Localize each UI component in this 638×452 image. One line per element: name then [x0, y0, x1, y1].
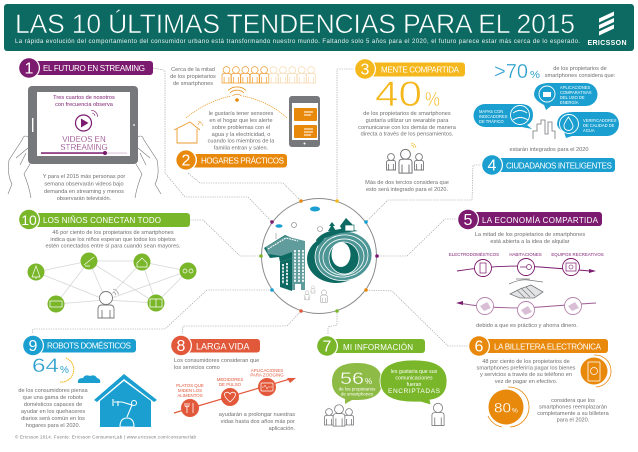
icons: top arrow with rentals — [457, 258, 596, 276]
text: robots: domésticos capaces de — [24, 402, 82, 408]
labels: rental categories: EQUIPOS RECREATIVOS — [551, 252, 604, 257]
text: reemplazarán: smartphones reemplazarán — [539, 404, 607, 410]
heading 7: MI INFORMACIÓN — [343, 343, 413, 352]
bubble: mapas: INDICADORES — [479, 114, 508, 119]
tablet screen — [32, 92, 135, 156]
text: pagar — [477, 359, 576, 385]
heading 5: 5 — [464, 212, 473, 229]
tablet screen: con frecuencia observa — [55, 102, 114, 108]
panel: 1 el futuro en streaming — [8, 57, 161, 202]
bubble: agua: DE CALIDAD DE — [583, 123, 615, 128]
text: sensores: familia entran y salen. — [214, 146, 269, 152]
text: cerca de la mitad — [170, 67, 216, 87]
stat 64%: 64 — [32, 356, 60, 377]
text: pagar: smartphones preferiría pagar los bienes — [477, 366, 576, 372]
text: prolongar: ayudarán a prolongar nuestras — [219, 412, 295, 418]
labels: rental categories: ELECTRODOMÉSTICOS — [449, 252, 499, 257]
text: pagar: 48 por ciento de los propietarios de — [482, 359, 570, 365]
labels: services: MEDIDORES — [217, 377, 243, 382]
text: consumidores: Los consumidores consideran que — [174, 358, 259, 364]
heading 9: 9 — [29, 338, 38, 355]
stat 40%: % — [425, 89, 440, 111]
icon: tablet — [28, 86, 138, 164]
text: ahorra dinero: debido a que es práctico y ahorra dinero. — [476, 323, 578, 329]
text: streaming — [43, 174, 125, 202]
icon: people — [324, 405, 354, 426]
tablet screen: STREAMING — [60, 143, 108, 152]
text: streaming: observarán televisión. — [57, 196, 112, 202]
stat 40%: 40 — [375, 75, 422, 114]
icon: handshake — [509, 279, 543, 298]
text: robots: hogares para el 2020. — [26, 423, 81, 429]
bubble: agua — [557, 112, 619, 138]
stat 80%: 80 — [494, 400, 511, 416]
bubble: aplicaciones: APLICACIONES — [560, 85, 591, 90]
bubble: 56%: de smartphones — [341, 392, 374, 396]
text: pagar: y servicios a través de su teléfono en — [480, 372, 572, 378]
title: LAS 10 ÚLTIMAS TENDENCIAS PARA EL 2015 — [15, 9, 575, 39]
text: cerca de la mitad: de smartphones — [173, 81, 213, 87]
bubble: agua: VERIFICADORES — [583, 118, 617, 123]
heading 3 — [354, 58, 465, 80]
heading 2: 2 — [182, 152, 191, 170]
text: niños: 46 por ciento de los propietarios de smartphones — [52, 230, 174, 236]
stat 70%: % — [530, 70, 540, 81]
panel: 8 larga vida — [170, 334, 296, 432]
heading 4 — [481, 154, 615, 176]
heading 7: 7 — [323, 338, 332, 356]
labels: services — [176, 368, 284, 398]
text: cerca de la mitad: Cerca de la mitad — [171, 67, 215, 73]
text: streaming: demanda en streaming y menos — [44, 189, 124, 195]
icon: house — [174, 121, 203, 143]
icon: wifi with dotted arcs — [186, 87, 287, 118]
bubble: aplicaciones: DEL USO DE — [560, 95, 585, 100]
text: sensores: sobre problemas con el — [212, 125, 270, 131]
text: wearable: de los propietarios de smartphones — [363, 111, 451, 117]
labels: services: PLATOS QUE — [176, 383, 204, 388]
heading 5 — [457, 208, 602, 230]
icon: cloud — [78, 375, 100, 383]
text: robots: ayudar en los quehaceres — [21, 409, 85, 415]
text: wearable: gustaría utilizar un wearable para — [366, 118, 449, 124]
heading 1: 1 — [25, 60, 34, 78]
text: cerca de la mitad: de los propietarios — [170, 74, 216, 80]
connector lines — [32, 68, 482, 346]
network diagram — [28, 252, 196, 318]
stat 80% — [488, 387, 529, 427]
icon: hands — [8, 136, 161, 198]
stat 64% — [32, 356, 74, 382]
text: robots — [18, 388, 89, 429]
bubble: encriptadas: fueran — [407, 382, 421, 388]
text: niños: estén conectados entre sí para cuando sean mayores. — [46, 244, 181, 250]
bubble: aplicaciones: ENERGÍA — [560, 100, 579, 105]
icon: ten people — [222, 67, 316, 83]
icon: robot house — [94, 374, 157, 427]
heading 8 — [170, 334, 260, 356]
heading 4: 4 — [488, 158, 497, 174]
labels: rental categories: HABITACIONES — [509, 252, 542, 257]
labels: services: DE PULSO — [219, 382, 242, 387]
text: prolongar: aplicación. — [269, 426, 295, 432]
text: sensores: en el hogar que les alerte — [209, 118, 273, 124]
subtitle: La rápida evolución del comportamiento del consumidor urbano está transformando nuestro mundo. Faltando solo 5 años para el 2020, el futuro parece estar más cerca de lo esperado. — [15, 39, 580, 45]
labels: services: PARA ZOOGING — [250, 372, 284, 378]
panel: 4 ciudadanos inteligentes — [474, 61, 619, 176]
icons: bottom arrow with savings — [456, 298, 596, 318]
heading 1 — [18, 57, 153, 79]
bubble: 56% — [332, 363, 382, 404]
stat 64%: % — [60, 365, 69, 376]
labels: rental categories — [449, 252, 604, 257]
heading 8: LARGA VIDA — [196, 342, 250, 352]
text: reemplazarán: completamente a su billetera — [537, 411, 610, 417]
stat 70%: >70 — [494, 61, 528, 83]
text: sensores: le gustaría tener sensores — [209, 111, 274, 117]
heading 2 — [175, 149, 287, 171]
heading 6: 6 — [475, 338, 484, 356]
stat 80%: % — [512, 408, 518, 414]
people under 10 — [305, 286, 327, 302]
bubble: agua: AGUA — [583, 128, 595, 133]
heading 10 — [18, 208, 190, 230]
heading 7 — [316, 335, 425, 357]
text: reemplazarán: considera que los — [551, 398, 595, 404]
text: considera que: smartphones considera que: — [545, 73, 616, 79]
bubble: encriptadas: comunicaciones — [395, 376, 433, 382]
text: streaming: Y para el 2015 más personas por — [43, 174, 125, 180]
text: wearable: comunicarse con los demás de manera — [358, 125, 457, 131]
heading 10: LOS NIÑOS CONECTAN TODO — [43, 216, 161, 225]
heading 3: MENTE COMPARTIDA — [381, 66, 460, 74]
bubble: aplicaciones: COMPARATIVAS — [560, 90, 592, 95]
heading 1: EL FUTURO EN STREAMING — [43, 64, 145, 73]
text: consumidores: los servicios como — [174, 365, 220, 371]
heading 3: 3 — [361, 62, 370, 78]
heading 10: 10 — [21, 212, 37, 228]
bubble: encriptadas — [380, 360, 447, 405]
footer: © Ericsson 2014. Fuente: Ericsson ConsumerLab | www.ericsson.com/consumerlab — [15, 434, 197, 440]
icon: city — [533, 120, 555, 139]
text: reemplazarán — [537, 398, 610, 424]
heading 9 — [22, 334, 136, 356]
text: considera que — [545, 66, 616, 79]
text: niños: indica que los niños esperan que todos los objetos — [50, 237, 176, 243]
text: considera que: de los propietarios de — [553, 66, 607, 72]
text: alquilar: La mitad de los propietarios de smartphones — [475, 232, 585, 238]
text: prolongar — [219, 412, 295, 432]
Ericsson logo: ERICSSON — [588, 40, 626, 47]
panel: 9 robots domésticos — [18, 334, 157, 429]
bubble: mapas: DE TRÁFICO — [479, 119, 504, 124]
bubble: 56%: % — [365, 377, 372, 386]
bubble: 56%: de los propietarios — [339, 386, 376, 392]
bubble: mapas: MAPAS CON — [479, 109, 503, 114]
heading 9: ROBOTS DOMÉSTICOS — [47, 342, 131, 350]
numeral 0 — [307, 228, 375, 284]
bubble: encriptadas: les gustaría que sus — [391, 369, 438, 375]
text: integrados: estarán integrados para el 2020 — [510, 147, 588, 153]
text: consumidores — [174, 358, 259, 371]
text: wearable: directa a través de los pensamientos. — [361, 132, 454, 138]
heading 6: LA BILLETERA ELECTRÓNICA — [494, 342, 602, 352]
heading 8: 8 — [177, 338, 186, 355]
panel: 3 mente compartida — [354, 58, 465, 193]
text: robots: de los consumidores piensa — [18, 388, 89, 394]
icon: three people — [386, 143, 424, 173]
labels: services: APLICACIONES — [251, 368, 283, 373]
small icons around 10 — [276, 206, 320, 239]
text: sensores — [208, 111, 275, 152]
text: reemplazarán: para el 2020. — [557, 418, 590, 424]
Ericsson logo — [588, 12, 626, 47]
panel: 10 los niños conectan todo — [18, 208, 196, 318]
text: dos tercios: esto será integrado para el 2020. — [366, 187, 448, 193]
text: sensores: agua y la electricidad, o — [212, 132, 270, 138]
text: alquilar — [475, 232, 585, 245]
text: sensores: cuando los miembros de la — [208, 138, 275, 144]
icon: phone payment — [580, 355, 611, 387]
central graphic: 10 in a circle — [259, 198, 379, 314]
text: robots: que una gama de robots — [23, 395, 84, 401]
heading 6 — [468, 335, 608, 357]
heading 4: CIUDADANOS INTELIGENTES — [506, 162, 612, 170]
numeral 1 — [264, 235, 305, 291]
bubble: aplicaciones — [534, 83, 597, 110]
bubble: 56%: 56 — [340, 369, 364, 388]
city on top of zero — [316, 218, 358, 246]
text: alquilar: está abierta a la idea de alquilar — [490, 239, 570, 245]
text: pagar: vez de pagar en efectivo. — [495, 379, 558, 385]
panel: 5 la economía compartida — [449, 208, 604, 329]
text: wearable — [358, 111, 457, 138]
bubble: encriptadas: ENCRIPTADAS — [388, 388, 441, 395]
panel: 7 mi información — [316, 335, 447, 426]
tablet screen: VIDEOS EN — [62, 135, 106, 144]
heading 5: LA ECONOMÍA COMPARTIDA — [482, 216, 599, 225]
icon: phone — [289, 96, 320, 147]
text: dos tercios — [365, 180, 449, 193]
colored dots on circle — [259, 199, 379, 313]
text: robots: diarios será común en los — [21, 416, 85, 422]
text: niños — [46, 230, 181, 250]
tablet screen: Tres cuartos de nosotros — [53, 95, 115, 101]
text: streaming: semana observarán videos bajo — [44, 182, 124, 188]
text: prolongar: vidas hasta dos años más por — [221, 419, 295, 425]
panel: 6 la billetera electrónica — [468, 335, 611, 427]
chart: rising arrow with services — [174, 378, 296, 417]
labels: services: ALIMENTOS — [177, 393, 203, 398]
panel: 2 hogares prácticos — [170, 67, 320, 171]
labels: services: MIDEN LOS — [178, 388, 202, 393]
icon: person — [432, 403, 444, 425]
stat 40% — [375, 75, 440, 114]
text: dos tercios: Más de dos tercios considera que — [365, 180, 449, 186]
heading 2: HOGARES PRÁCTICOS — [201, 156, 284, 166]
bubble: mapas — [474, 104, 533, 129]
header banner — [4, 4, 634, 51]
